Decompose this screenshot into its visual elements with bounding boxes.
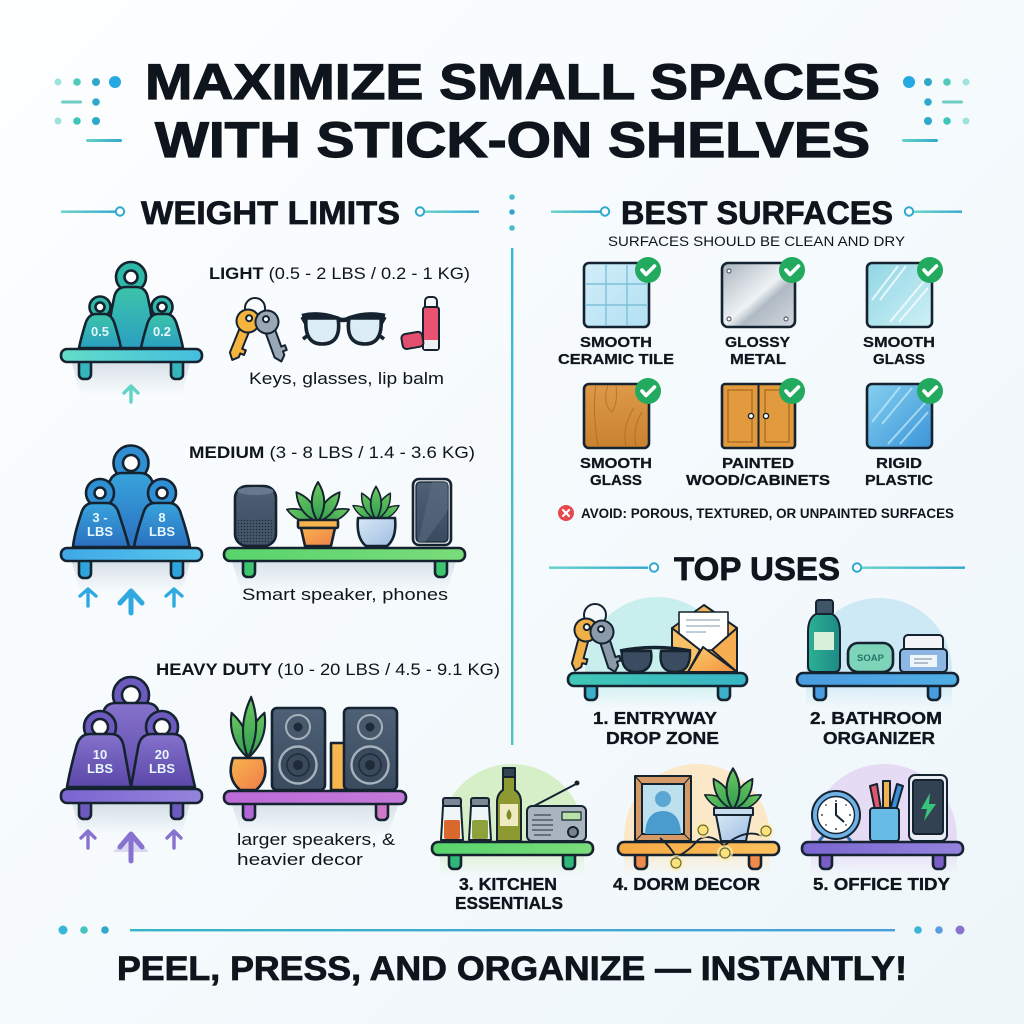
- tier: heavy duty: [61, 661, 500, 869]
- heading: weight limits: [61, 195, 479, 231]
- label: 5. OFFICE TIDY: [813, 874, 950, 894]
- label: 2. BATHROOM: [810, 708, 942, 728]
- icon: heavy weights on shelf: 20: [155, 747, 169, 762]
- icon: heavy weights on shelf: LBS: [87, 761, 113, 776]
- icon: bookshelf speakers and book: [272, 708, 397, 790]
- icon: light weights on shelf: [61, 262, 202, 395]
- footer divider: [58, 926, 964, 934]
- surface: rigid plastic: [865, 378, 943, 489]
- surface: painted cabinets: WOOD/CABINETS: [686, 472, 830, 489]
- icon: phone with charge bolt: [909, 775, 947, 841]
- shelf: heavy items: [224, 791, 406, 835]
- label: 4. DORM DECOR: [613, 874, 760, 894]
- icon: potted plant: [285, 482, 351, 546]
- tier: medium: [61, 444, 475, 613]
- icon: medium weights on shelf: LBS: [87, 524, 113, 539]
- label: DROP ZONE: [606, 728, 719, 748]
- avoid note: AVOID: POROUS, TEXTURED, OR UNPAINTED SURFACES: [581, 506, 954, 521]
- icon: medium weights on shelf: 3 -: [92, 510, 108, 525]
- arrows: medium load: [80, 589, 182, 613]
- title: [145, 54, 880, 168]
- surface: glossy metal: GLOSSY: [725, 334, 790, 351]
- icon: heavy weights on shelf: 10: [93, 747, 107, 762]
- icon: plant in pot: [702, 768, 764, 841]
- icon: clock: [812, 791, 860, 841]
- icon: light weights on shelf: 0.5: [91, 324, 109, 339]
- surface: painted cabinets: PAINTED: [722, 455, 794, 472]
- icon: cream jar: [900, 635, 947, 672]
- icon: succulent in blue pot: [351, 486, 401, 546]
- title: WITH STICK-ON SHELVES: [155, 112, 870, 168]
- icon: light weights on shelf: 0.2: [153, 324, 171, 339]
- panel: surfaces grid: [558, 257, 943, 489]
- label: [593, 708, 719, 748]
- tier: light: [61, 262, 470, 402]
- surfaces note: SURFACES SHOULD BE CLEAN AND DRY: [608, 234, 905, 249]
- surface: ceramic tile: CERAMIC TILE: [558, 351, 674, 368]
- shelf: [432, 842, 593, 869]
- label: [455, 874, 563, 913]
- arrows: heavy load: [81, 831, 181, 861]
- left title decoration: [54, 76, 122, 142]
- icon: envelope with letter: [672, 605, 737, 672]
- icon: sunglasses: [620, 648, 691, 672]
- icon: string lights: [660, 822, 774, 871]
- surface: glossy metal: METAL: [730, 351, 786, 368]
- icon: smart speaker: [235, 486, 276, 546]
- surface: ceramic tile: SMOOTH: [580, 334, 652, 351]
- icon: plant in orange pot: [225, 697, 271, 790]
- footer tagline: PEEL, PRESS, AND ORGANIZE — INSTANTLY!: [117, 950, 907, 988]
- surface: painted cabinets: [686, 378, 830, 489]
- icon: soap: SOAP: [857, 653, 885, 664]
- use 2: bathroom organizer: [797, 598, 958, 748]
- use 1: entryway drop zone: [564, 597, 747, 748]
- heavy examples text: heavier decor: [237, 850, 363, 869]
- surface: wood: GLASS: [590, 472, 642, 489]
- surface: wood: SMOOTH: [580, 455, 652, 472]
- arrow: light load: [124, 386, 138, 402]
- surface: wood: [580, 378, 661, 489]
- icon: glasses: [302, 314, 385, 344]
- icon: spice jars: [441, 798, 491, 840]
- icon: olive oil bottle: [497, 768, 521, 841]
- icon: heavy weights on shelf: [61, 677, 202, 834]
- shelf: [618, 842, 779, 869]
- heavy examples text: [237, 830, 396, 869]
- right title decoration: [902, 76, 970, 142]
- label: ESSENTIALS: [455, 893, 563, 913]
- light examples text: Keys, glasses, lip balm: [249, 369, 444, 388]
- light range label: LIGHT (0.5 - 2 LBS / 0.2 - 1 KG): [209, 265, 470, 283]
- icon: medium weights on shelf: 8: [158, 510, 166, 525]
- heavy duty range label: HEAVY DUTY (10 - 20 LBS / 4.5 - 9.1 KG): [156, 661, 500, 679]
- heading: weight limits: WEIGHT LIMITS: [141, 195, 400, 231]
- surface: smooth glass: SMOOTH: [863, 334, 935, 351]
- icon: heavy weights on shelf: LBS: [149, 761, 175, 776]
- surface: rigid plastic: RIGID: [876, 455, 922, 472]
- heading: best surfaces: [551, 195, 962, 231]
- use 5: office tidy: [802, 764, 963, 894]
- icon: bottle: [808, 600, 840, 672]
- icon: medium weights on shelf: LBS: [149, 524, 175, 539]
- shelf: [568, 673, 747, 700]
- heading: best surfaces: BEST SURFACES: [621, 195, 893, 231]
- label: ORGANIZER: [823, 728, 935, 748]
- heavy examples text: larger speakers, &: [237, 830, 396, 849]
- icon: picture frame: [635, 776, 691, 841]
- center divider: [509, 194, 515, 745]
- icon: keys: [222, 298, 292, 365]
- icon: soap: [848, 643, 893, 672]
- shelf: [802, 842, 963, 869]
- surface: smooth glass: GLASS: [873, 351, 925, 368]
- surface: rigid plastic: PLASTIC: [865, 472, 933, 489]
- surface: glossy metal: [722, 257, 805, 368]
- heading: top uses: TOP USES: [674, 551, 840, 587]
- icon: keys: [564, 604, 626, 675]
- label: [810, 708, 942, 748]
- shelf: medium items: [224, 548, 465, 592]
- label: 3. KITCHEN: [459, 874, 557, 894]
- label: 1. ENTRYWAY: [593, 708, 717, 728]
- icon: lip balm: [401, 297, 439, 350]
- title: MAXIMIZE SMALL SPACES: [145, 54, 880, 110]
- surface: smooth glass: [863, 257, 943, 368]
- surface: ceramic tile: [558, 257, 674, 368]
- icon: smartphone: [413, 479, 451, 545]
- icon: medium weights on shelf: [61, 446, 202, 592]
- medium range label: MEDIUM (3 - 8 LBS / 1.4 - 3.6 KG): [189, 444, 475, 462]
- heading: top uses: [549, 551, 965, 587]
- shelf: [797, 673, 958, 700]
- icon: radio: [527, 782, 586, 841]
- use 3: kitchen essentials: [432, 764, 593, 913]
- icon: pen cup: [870, 781, 903, 841]
- use 4: dorm decor: [613, 764, 779, 894]
- medium examples text: Smart speaker, phones: [242, 585, 448, 604]
